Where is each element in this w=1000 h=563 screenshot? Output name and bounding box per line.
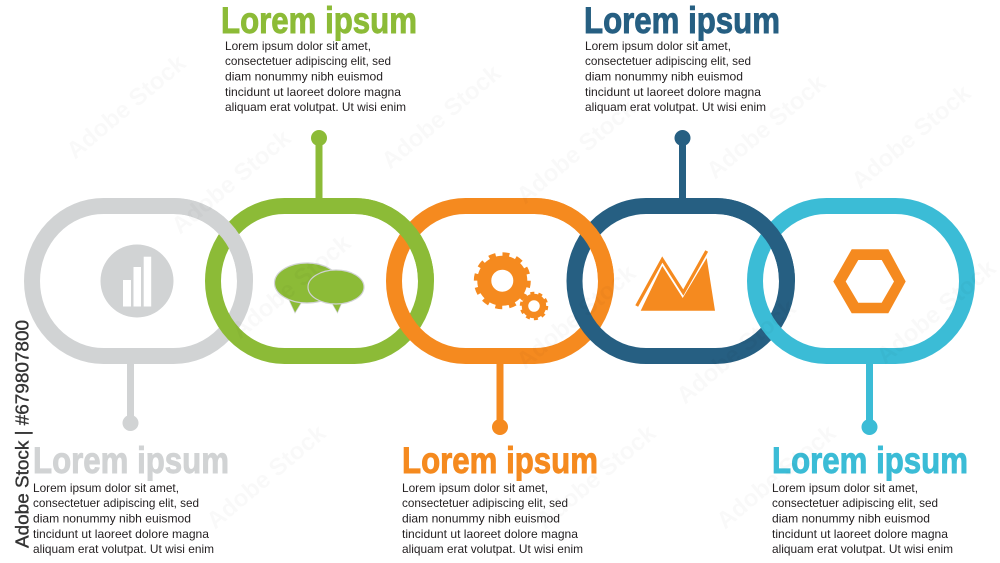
stem: gray	[122, 360, 138, 431]
text block: gray: tincidunt ut laoreet dolore magna	[33, 527, 209, 541]
text block: navy: diam nonummy nibh euismod	[585, 70, 743, 84]
text block: green: Lorem ipsum	[221, 0, 417, 41]
text block: orange: aliquam erat volutpat. Ut wisi enim	[402, 542, 583, 556]
text block: navy: tincidunt ut laoreet dolore magna	[585, 85, 761, 99]
text block: gray: Lorem ipsum dolor sit amet,	[33, 481, 179, 495]
icon: hexagon	[833, 249, 906, 313]
text block: cyan: Lorem ipsum dolor sit amet,	[772, 481, 918, 495]
text block: orange: diam nonummy nibh euismod	[402, 512, 560, 526]
text block: cyan	[772, 440, 968, 556]
text block: green: tincidunt ut laoreet dolore magna	[225, 85, 401, 99]
stem: orange	[492, 360, 508, 435]
text block: cyan: Lorem ipsum	[772, 440, 968, 481]
ring: navy	[574, 206, 787, 356]
text block: orange: Lorem ipsum dolor sit amet,	[402, 481, 548, 495]
text block: cyan: aliquam erat volutpat. Ut wisi enim	[772, 542, 953, 556]
text block: orange	[402, 440, 598, 556]
text block: green	[221, 0, 417, 114]
text block: navy: Lorem ipsum dolor sit amet,	[585, 39, 731, 53]
text block: orange: tincidunt ut laoreet dolore magna	[402, 527, 578, 541]
text block: green: consectetuer adipiscing elit, sed	[225, 54, 391, 68]
text block: navy: aliquam erat volutpat. Ut wisi enim	[585, 100, 766, 114]
icon: gears	[477, 255, 546, 318]
ring: cyan	[755, 206, 967, 356]
text block: navy: Lorem ipsum	[584, 0, 780, 41]
text block: orange: Lorem ipsum	[402, 440, 598, 481]
text block: green: aliquam erat volutpat. Ut wisi enim	[225, 100, 406, 114]
text block: gray: Lorem ipsum	[33, 440, 229, 481]
text block: cyan: tincidunt ut laoreet dolore magna	[772, 527, 948, 541]
text block: gray: consectetuer adipiscing elit, sed	[33, 496, 199, 510]
ring: orange	[394, 206, 606, 356]
text block: cyan: consectetuer adipiscing elit, sed	[772, 496, 938, 510]
icon: mountain chart	[637, 251, 715, 311]
stem: cyan	[862, 360, 878, 435]
icon: speech bubbles	[274, 263, 364, 313]
ring interlock overlaps	[176, 198, 795, 280]
text block: gray	[33, 440, 229, 556]
ring: gray	[32, 206, 245, 356]
text block: navy	[584, 0, 780, 114]
text block: cyan: diam nonummy nibh euismod	[772, 512, 930, 526]
text block: orange: consectetuer adipiscing elit, sed	[402, 496, 568, 510]
icon: bar chart in circle	[100, 244, 174, 318]
text block: gray: diam nonummy nibh euismod	[33, 512, 191, 526]
ring: green	[213, 206, 426, 356]
text block: navy: consectetuer adipiscing elit, sed	[585, 54, 751, 68]
text block: green: diam nonummy nibh euismod	[225, 70, 383, 84]
text block: gray: aliquam erat volutpat. Ut wisi enim	[33, 542, 214, 556]
side credit text: Adobe Stock | #679807800	[12, 320, 32, 548]
stem: navy	[674, 130, 690, 202]
text block: green: Lorem ipsum dolor sit amet,	[225, 39, 371, 53]
stem: green	[311, 130, 327, 202]
